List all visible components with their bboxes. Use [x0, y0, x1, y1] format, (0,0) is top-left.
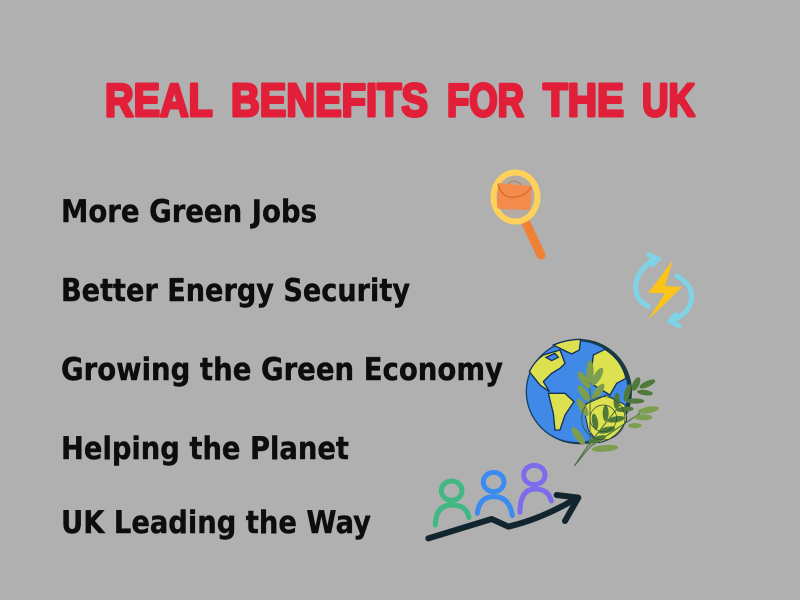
person: blue [477, 472, 512, 516]
title: THE [543, 74, 624, 126]
globe [526, 339, 632, 444]
icon: globe with leafy branch [526, 339, 659, 466]
benefit: helping the planet: Helping the Planet [61, 431, 349, 467]
person: purple [520, 465, 551, 512]
icon: lightning bolt with renewal arrows [636, 254, 692, 327]
icon: people with rising arrow [428, 465, 578, 538]
benefit: UK leading the way: UK Leading the Way [61, 505, 371, 541]
icon: magnifying glass over briefcase [494, 172, 541, 255]
benefit: growing the green economy: Growing the Green Economy [61, 352, 503, 388]
title: REAL [105, 74, 212, 126]
title: FOR [447, 74, 524, 126]
leafy branch [569, 360, 659, 466]
benefit: better energy security: Better Energy Security [61, 273, 410, 309]
person: green [435, 481, 469, 525]
title: BENEFITS [231, 74, 428, 126]
benefit: more green jobs: More Green Jobs [61, 194, 317, 230]
title: UK [642, 74, 695, 126]
benefit list [61, 194, 503, 541]
rising arrow [428, 495, 578, 538]
